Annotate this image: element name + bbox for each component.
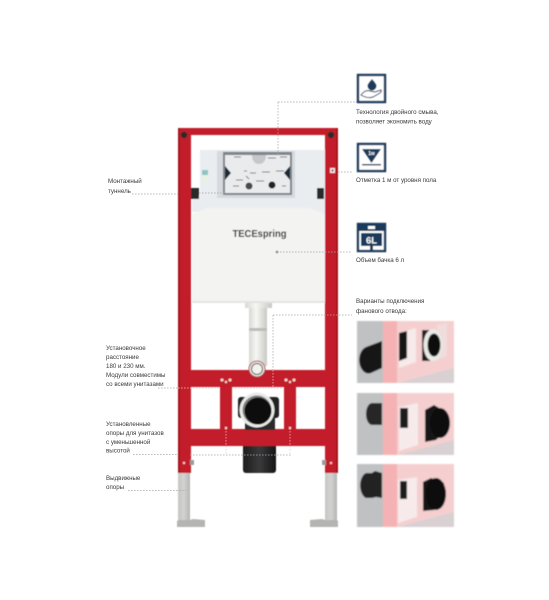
- text: 6 L volume: Объем бачка 6 л: [356, 257, 405, 264]
- label: mounting distance: Модули совместимы: [106, 372, 166, 379]
- label: mounting tunnel: Монтажный: [108, 178, 142, 185]
- label: installed supports: с уменьшенной: [106, 439, 151, 446]
- label: mounting distance: расстояние: [106, 354, 139, 361]
- cistern body: [192, 208, 325, 303]
- text: dual flush: Технология двойного смыва,: [356, 109, 439, 116]
- label: sliding supports: [106, 475, 141, 491]
- downpipe: [245, 303, 272, 377]
- label: installed supports: [106, 421, 164, 454]
- label: mounting distance: Установочное: [106, 345, 146, 352]
- label: mounting distance: 180 и 230 мм.: [106, 363, 146, 370]
- drain stub black: [243, 440, 276, 473]
- label: mounting tunnel: [108, 178, 142, 195]
- label: installed supports: Установленные: [106, 421, 151, 428]
- text: dual flush: [356, 109, 439, 126]
- photo: drain variant 3: [357, 464, 454, 527]
- text: dual flush: позволяет экономить воду: [356, 118, 433, 126]
- drain elbow: [238, 392, 279, 430]
- photo: drain variant 2: [357, 393, 454, 455]
- cistern upper panel: [191, 150, 325, 214]
- label: mounting distance: со всеми унитазами: [106, 381, 164, 388]
- icon: 1 m mark: 1м: [368, 151, 375, 157]
- label: installed supports: опоры для унитазов: [106, 430, 164, 437]
- icon: 6 L cistern: [358, 224, 385, 251]
- frame bolts: [181, 132, 335, 465]
- label: installed supports: высотой: [106, 448, 130, 454]
- label: mounting distance: [106, 345, 166, 388]
- label: mounting tunnel: туннель: [108, 188, 131, 195]
- label: sliding supports: опоры: [106, 484, 125, 491]
- icon: dual flush hand and drop: [358, 75, 385, 102]
- label: sliding supports: Выдвижные: [106, 475, 141, 482]
- support feet: [177, 473, 338, 527]
- leader lines: [128, 102, 357, 490]
- photo: drain variant 1: [357, 321, 454, 383]
- heading: drain variants: фанового отвода:: [356, 308, 407, 315]
- icon: 6 L cistern: 6L: [366, 236, 377, 246]
- heading: drain variants: [356, 298, 424, 315]
- icon: 1 m mark: [358, 144, 385, 171]
- flush actuator opening: [217, 151, 295, 198]
- heading: drain variants: Варианты подключения: [356, 298, 424, 305]
- logo TECEspring: TECEspring: [232, 228, 286, 240]
- text: 1 m mark: Отметка 1 м от уровня пола: [356, 177, 437, 184]
- red frame bars: [178, 128, 338, 473]
- installation frame: [177, 128, 338, 527]
